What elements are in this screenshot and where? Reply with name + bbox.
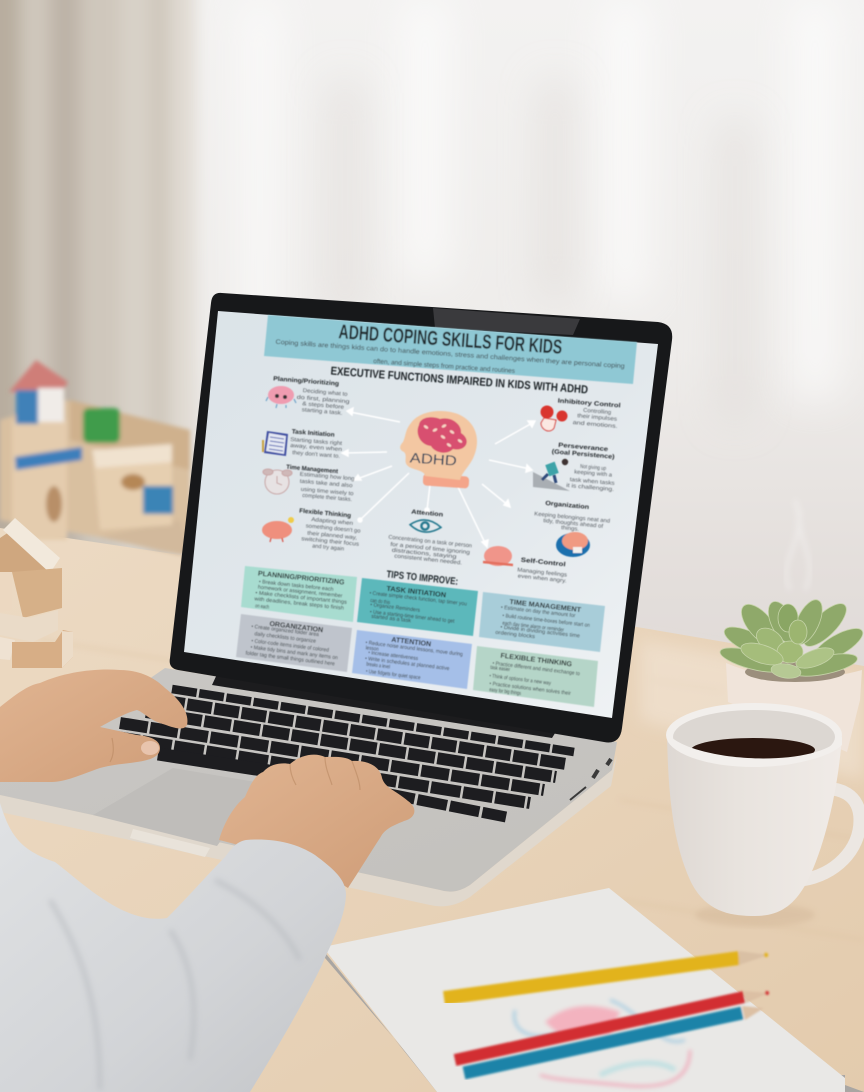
background: white curtains wall [0, 0, 864, 700]
tips card: task initiation: • Use a starting-time timer ahead to get [370, 609, 455, 625]
icon: brain in blue ring [556, 532, 590, 557]
left hand [0, 670, 187, 782]
item: task initiation [262, 428, 343, 460]
tips card: planning/prioritizing [241, 566, 357, 622]
tips card: flexible thinking: • Practice different and mind exchange to [492, 661, 580, 677]
tips card: planning/prioritizing: homework or assignment, remember [258, 585, 343, 599]
tips card: time management: • Estimate on day the amount for [501, 605, 576, 619]
item: inhibitory control: their impulses [577, 413, 617, 423]
icon: coral brain [262, 517, 294, 542]
icon: pink brain [266, 386, 296, 408]
keyboard [110, 689, 574, 817]
subtitle: often, and simple steps from practice and routines [373, 358, 516, 375]
tips card: attention: • Reduce noise around lessons, move during [365, 640, 463, 658]
item: flexible thinking: switching their focus [301, 536, 359, 548]
desk surface [0, 528, 864, 1092]
tips card: attention: • Use fidgets for quiet space [365, 669, 421, 681]
item: time management: using time wisely to [300, 487, 354, 497]
tips card: flexible thinking: • Think of options for a new way [489, 673, 551, 687]
item: planning/prioritizing: Deciding what to [302, 388, 348, 398]
trackpad [93, 768, 262, 846]
foreground wooden block house [0, 518, 73, 668]
right hand [219, 755, 414, 888]
item: perseverance: it is challenging. [566, 483, 615, 493]
item: inhibitory control: Inhibitory Control [557, 398, 621, 409]
screen bezel [170, 293, 672, 742]
item: perseverance: keeping with a [574, 469, 613, 479]
mug rim [666, 703, 842, 767]
tips card: organization: • Create organized folder area [251, 624, 319, 638]
tips card: time management: • Divide in dividing activities time [500, 624, 580, 640]
mug body [667, 733, 842, 916]
tips card: flexible thinking: easy for big things [489, 687, 522, 697]
title: ADHD COPING SKILLS FOR KIDS [338, 321, 563, 359]
tips card: attention: • Increase attentiveness [368, 650, 419, 662]
red pencil [455, 991, 769, 1060]
item: attention: Concentrating on a task or person [388, 535, 472, 549]
item: task initiation: Starting tasks right [290, 437, 343, 447]
head silhouette [400, 411, 477, 480]
item: organization: Keeping belongings neat and [534, 511, 610, 525]
heading: tips to improve: TIPS TO IMPROVE: [386, 569, 459, 588]
tips card: time management: each day time alarm or reminder [502, 621, 564, 634]
item: perseverance: (Goal Persistence) [551, 448, 615, 461]
tips card: task initiation: TASK INITIATION [386, 586, 446, 599]
item: flexible thinking: their planned way, [307, 531, 358, 541]
item: self-control [483, 546, 567, 585]
mug shadow [695, 903, 815, 927]
item: task initiation: away, even when [290, 443, 342, 453]
item: planning/prioritizing [266, 375, 350, 417]
tips card: organization: folder tag the small things outlined here [245, 651, 335, 667]
tips card: planning/prioritizing: PLANNING/PRIORITIZING [258, 570, 345, 587]
side ports [570, 759, 611, 800]
item: flexible thinking: Adapting when [311, 517, 353, 527]
item: time management: tasks take and also [299, 479, 353, 489]
tips card: flexible thinking: FLEXIBLE THINKING [500, 653, 573, 668]
tips card: time management [479, 592, 605, 652]
item: perseverance: Perseverance [558, 442, 609, 453]
tips card: flexible thinking: task easier [490, 665, 511, 673]
icon: alarm clock [263, 469, 292, 494]
pot [726, 663, 862, 752]
item: time management [263, 464, 355, 503]
laptop base front lip [0, 755, 617, 906]
subtitle: Coping skills are things kids can do to handle emotions, stress and challenges when they are personal coping [275, 339, 625, 370]
icon: child climbing slope [533, 459, 570, 491]
item: planning/prioritizing: Planning/Prioritizing [273, 375, 340, 388]
steam [786, 500, 810, 590]
mug handle [802, 789, 860, 880]
item: task initiation: Task Initiation [291, 428, 335, 439]
finger creases [290, 757, 360, 790]
item: inhibitory control: and emotions. [572, 420, 618, 430]
tips card: task initiation: • Organize Reminders [370, 602, 421, 614]
coffee mug [666, 703, 860, 927]
item: organization: things. [561, 525, 580, 533]
icon: peach brain [483, 546, 513, 566]
blue pencil [464, 1006, 764, 1073]
tips card: organization: • Make tidy bins and mark any items on [250, 645, 338, 661]
succulent leaves [718, 596, 864, 681]
item: self-control: Managing feelings [517, 567, 567, 579]
item: organization: Organization [545, 500, 590, 511]
tips card: attention: • Write in schedules at planned active [365, 656, 450, 672]
tips card: attention: breaks a level [366, 662, 390, 670]
tips card: flexible thinking: • Practice solutions when solves their [489, 681, 571, 697]
item: attention [388, 508, 472, 567]
tips card: organization: ORGANIZATION [269, 621, 323, 634]
item: inhibitory control: Controlling [583, 408, 611, 416]
item: planning/prioritizing: & steps before [302, 401, 344, 411]
background: taupe curtain on left [0, 0, 195, 580]
item: planning/prioritizing: do first, planning [296, 395, 350, 405]
bezel camera notch [433, 308, 580, 335]
ADHD label: ADHD [409, 449, 457, 469]
item: time management: Estimating how long [299, 472, 355, 482]
head collar [423, 473, 469, 489]
item: organization: tidy, thoughts ahead of [543, 518, 604, 530]
header banner [264, 315, 637, 384]
item: time management: Time Management [286, 464, 338, 475]
tips card: attention: lesson [365, 645, 379, 653]
tips card: time management: ordering blocks [495, 630, 536, 640]
tips card: attention: ATTENTION [391, 637, 431, 648]
plant in white pot [718, 500, 864, 752]
tips card: time management: TIME MANAGEMENT [509, 599, 582, 614]
tips card: task initiation [357, 578, 478, 636]
tips card: organization: • Color-code items inside of colored [251, 638, 329, 654]
yellow pencil [444, 951, 768, 998]
trackpad notch [130, 829, 210, 857]
tips card: planning/prioritizing: with deadlines, break steps to finish [253, 596, 344, 612]
laptop base top [0, 668, 617, 892]
item: self-control: Self-Control [520, 557, 566, 568]
icon: stop hand and red shapes [540, 406, 568, 431]
tips card: flexible thinking [473, 646, 598, 707]
item: planning/prioritizing: starting a task. [301, 407, 343, 417]
central ADHD head [400, 411, 477, 489]
child's drawing on notebook [514, 1000, 690, 1086]
item: self-control: even when angry. [517, 573, 567, 585]
coffee [691, 738, 815, 762]
item: perseverance [533, 442, 615, 493]
brain [418, 417, 467, 453]
tips card: task initiation: can do this [370, 598, 391, 606]
hinge [212, 672, 562, 738]
icon: eye [410, 519, 441, 533]
tips card: organization: daily checklists to organize [254, 631, 316, 645]
icon: clipboard [262, 431, 288, 456]
item: flexible thinking: Flexible Thinking [299, 508, 352, 520]
item: task initiation: they don't want to. [292, 450, 341, 460]
tips card: attention [352, 630, 472, 689]
heading: executive functions: EXECUTIVE FUNCTIONS IMPAIRED IN KIDS WITH ADHD [330, 366, 588, 396]
item: attention: for a period of time ignoring [390, 542, 470, 556]
item: perseverance: task when tasks [569, 477, 615, 487]
notebook [323, 888, 864, 1092]
blurred wooden toy blocks in background [0, 360, 190, 555]
item: attention: Attention [411, 508, 444, 519]
item: attention: consistent when needed. [394, 553, 463, 567]
tips card: task initiation: • Create simple check function, tap timer you [369, 590, 467, 608]
item: flexible thinking: and try again [312, 543, 344, 553]
laptop [0, 293, 672, 906]
item: attention: distractions, staying [391, 548, 457, 560]
tips card: time management: • Build routine time-boxes before start on [502, 613, 590, 629]
item: flexible thinking: something doesn't go [305, 523, 361, 535]
item: inhibitory control [540, 398, 621, 431]
on-screen infographic [236, 315, 637, 707]
item: flexible thinking [262, 508, 361, 553]
tips card: planning/prioritizing: • Make checklists of important things [255, 590, 347, 606]
tips card: planning/prioritizing: • Break down tasks before each [258, 579, 334, 593]
screen [184, 311, 658, 718]
grey sleeve [0, 803, 346, 1092]
arrows from head to functions [342, 408, 535, 547]
item: organization [534, 500, 610, 557]
item: time management: complete their tasks. [302, 493, 353, 503]
tips card: planning/prioritizing: on each [255, 603, 269, 611]
tips card: organization [236, 614, 352, 672]
item: perseverance: Not giving up [580, 464, 606, 472]
tips card: task initiation: started as a task [371, 614, 412, 624]
thumb nail [141, 741, 159, 755]
